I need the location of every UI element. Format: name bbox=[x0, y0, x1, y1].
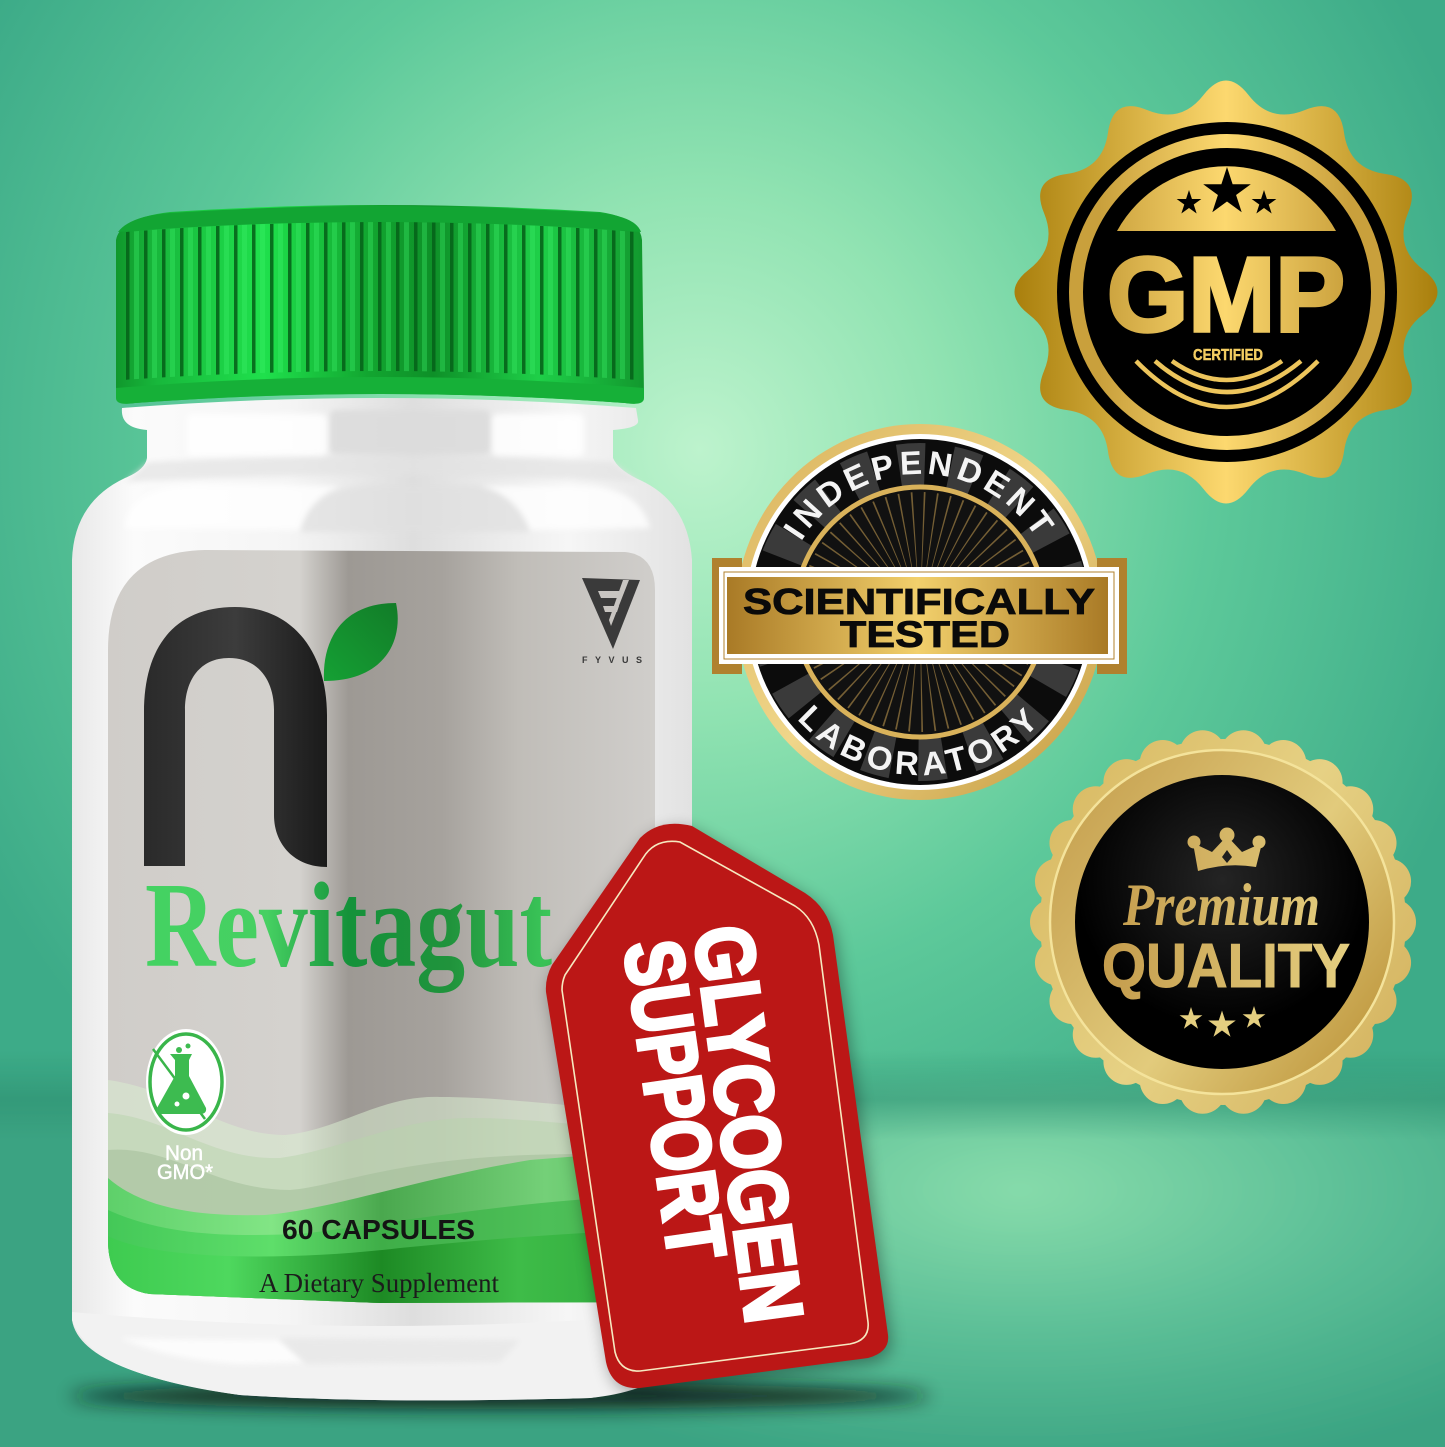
GMP dome with stars bbox=[1117, 166, 1336, 231]
bottle neck and shoulder highlights bbox=[125, 410, 650, 532]
premium stars bbox=[1180, 1006, 1265, 1037]
background: studio floor bbox=[0, 1092, 1445, 1447]
product name: Revitagut bbox=[145, 858, 552, 993]
label waves bbox=[108, 1080, 596, 1303]
floor shadow under bottle bbox=[70, 1383, 930, 1409]
red tag: glycogen support bbox=[546, 824, 891, 1393]
arc text laboratory bbox=[757, 612, 1083, 775]
ribbon banner: SCIENTIFICALLY bbox=[743, 581, 1095, 622]
ribbon banner bbox=[712, 558, 1127, 674]
premium script: Premium bbox=[1122, 872, 1320, 938]
quality wordmark: QUALITY bbox=[1102, 932, 1350, 1001]
badge: GMP certified bbox=[1014, 80, 1438, 504]
maker logo: FYVUS bbox=[582, 655, 642, 665]
certified caption: CERTIFIED bbox=[1193, 347, 1263, 364]
crown icon bbox=[1188, 828, 1266, 871]
product bottle bbox=[72, 205, 692, 1400]
badge: premium quality bbox=[1040, 739, 1406, 1105]
non-GMO badge: GMO* bbox=[157, 1161, 213, 1184]
arc text independent bbox=[782, 474, 1058, 612]
non-GMO badge bbox=[146, 1029, 226, 1184]
badge: scientifically tested: LABORATORY bbox=[798, 704, 1034, 776]
GMP wordmark: GMP bbox=[1107, 236, 1345, 354]
tag text line 1: GLYCOGEN bbox=[676, 920, 819, 1328]
maker logo bbox=[582, 578, 642, 665]
bottle cap bbox=[116, 205, 644, 404]
brand logo leaf bbox=[324, 603, 398, 681]
non-GMO badge: Non bbox=[165, 1142, 203, 1165]
label subtitle: A Dietary Supplement bbox=[259, 1268, 499, 1298]
ribbon banner: TESTED bbox=[840, 614, 1010, 655]
bottle body bbox=[72, 398, 692, 1400]
bottle base highlights bbox=[72, 1312, 692, 1400]
sunburst rays bbox=[852, 544, 988, 680]
badge: scientifically tested: INDEPENDENT bbox=[783, 451, 1055, 540]
brand logo n bbox=[144, 607, 327, 867]
background: studio wall bbox=[0, 0, 1445, 1120]
tag text line 2: SUPPORT bbox=[606, 935, 742, 1265]
GMP arcs bbox=[1136, 361, 1318, 407]
capsule count: 60 CAPSULES bbox=[282, 1214, 475, 1245]
badge: scientifically tested bbox=[712, 424, 1127, 800]
paper label bbox=[108, 550, 655, 1305]
